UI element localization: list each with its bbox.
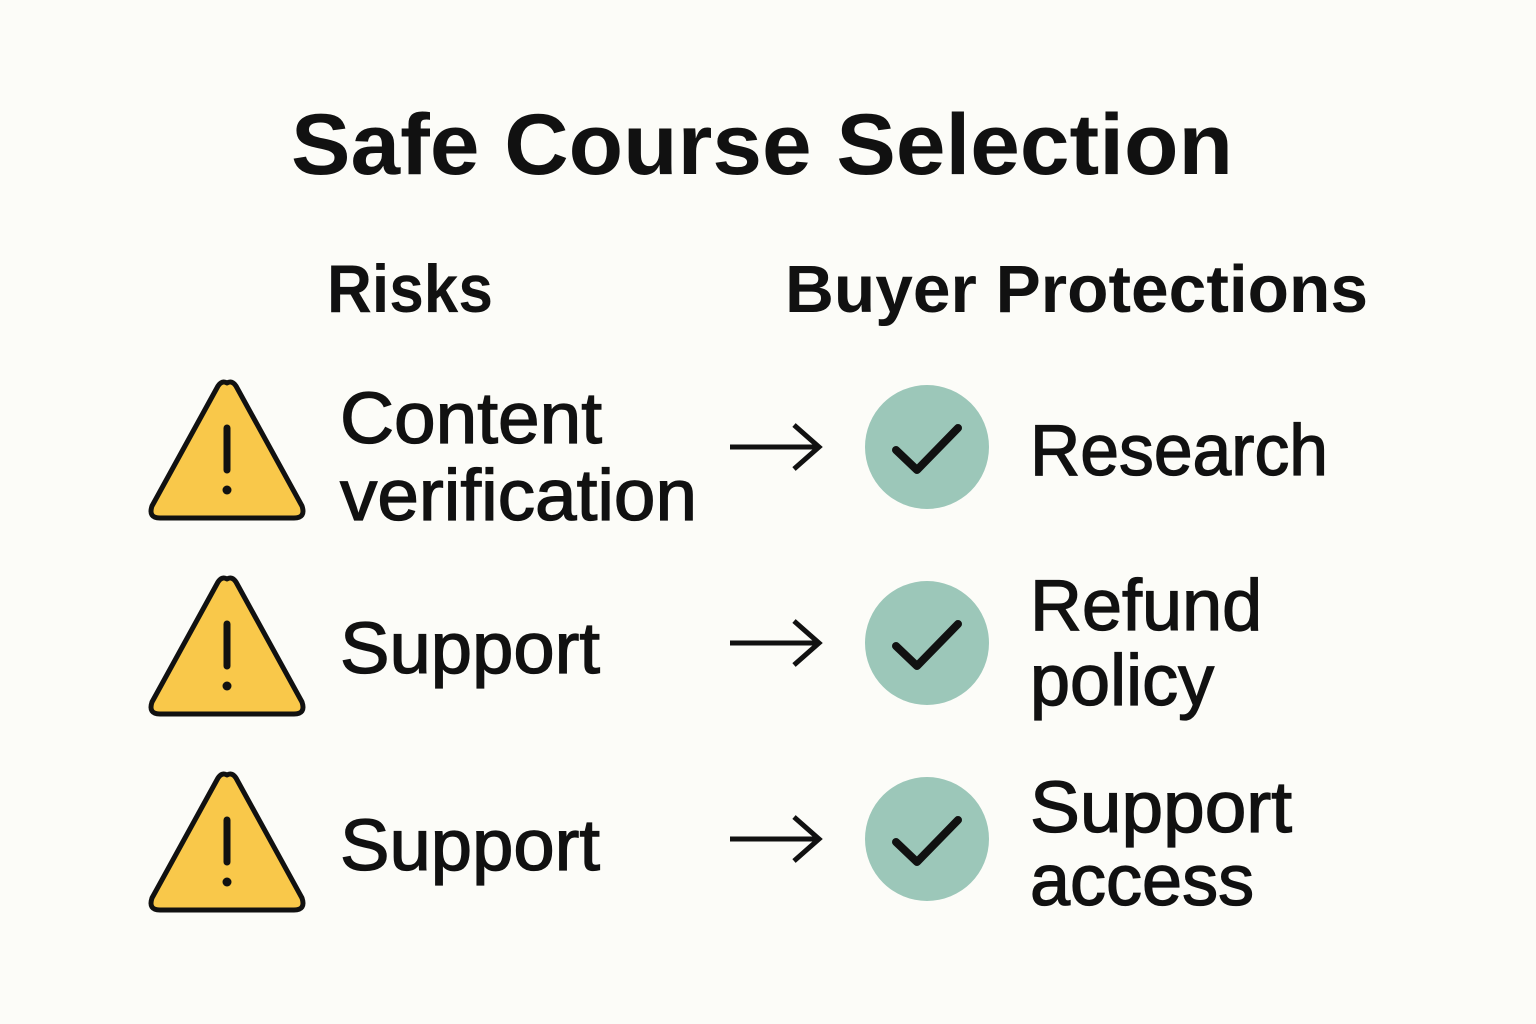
text: support access: access: [1030, 841, 1254, 921]
icon: warning triangle 2: [151, 578, 303, 714]
heading: risks: Risks: [327, 251, 493, 327]
icon: warning triangle 3: [151, 774, 303, 910]
heading: buyer protections: Buyer Protections: [785, 252, 1368, 327]
text: support access: Support: [1030, 768, 1292, 848]
text: refund policy: Refund: [1030, 566, 1262, 646]
arrow 2: [730, 621, 819, 665]
text: refund policy: policy: [1030, 641, 1214, 721]
icon: check 3: [865, 777, 989, 901]
text: content verification: [340, 379, 697, 536]
text: support: Support: [340, 609, 600, 689]
text: research: Research: [1030, 411, 1328, 491]
row 1: [151, 379, 1328, 536]
text: content verification: Content: [340, 379, 602, 459]
row 2: [151, 566, 1262, 721]
icon: check 1: [865, 385, 989, 509]
icon: warning triangle 1: [151, 382, 303, 518]
text: support 2: Support: [340, 806, 600, 886]
text: refund policy: [1030, 566, 1262, 721]
arrow 3: [730, 817, 819, 861]
arrow 1: [730, 425, 819, 469]
row 3: [151, 768, 1292, 921]
text: content verification: verification: [340, 456, 697, 536]
icon: check 2: [865, 581, 989, 705]
text: support access: [1030, 768, 1292, 921]
title: Safe Course Selection: [291, 97, 1233, 193]
